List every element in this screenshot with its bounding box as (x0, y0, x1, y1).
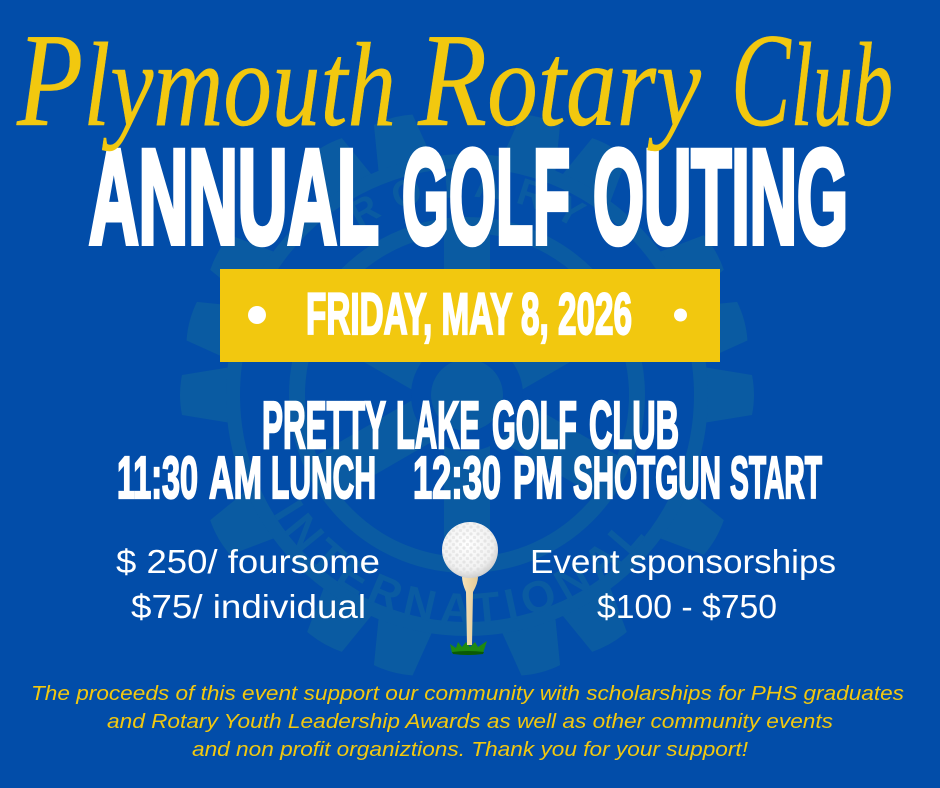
date banner (220, 269, 720, 362)
footer note (31, 683, 904, 761)
title: Plymouth Rotary Club (16, 6, 893, 154)
title: Plymouth Rotary Club: Club (731, 6, 893, 154)
date banner: FRIDAY, MAY 8, 2026 (306, 282, 632, 347)
heading: Annual Golf Outing: ANNUAL (89, 123, 379, 272)
footer note: and non profit organiztions. Thank you for your support! (192, 739, 748, 761)
pricing: $ 250/ foursome (116, 543, 380, 580)
title: Plymouth Rotary Club: Plymouth (16, 6, 396, 154)
venue name: GOLF (492, 389, 577, 463)
sponsorships: $100 - $750 (597, 588, 777, 625)
venue name: PRETTY (262, 389, 386, 463)
text: START (730, 444, 822, 511)
pricing: $75/ individual (131, 588, 366, 625)
schedule: LUNCH (271, 444, 376, 511)
venue name: LAKE (396, 389, 480, 463)
pricing (116, 543, 380, 625)
venue name (262, 389, 679, 463)
watermark: rotary gear: ROTARY (353, 172, 586, 225)
heading: Annual Golf Outing: GOLF (402, 123, 570, 272)
schedule: 11:30 (117, 444, 198, 511)
title: Plymouth Rotary Club: Rotary (417, 6, 702, 154)
sponsorships: Event sponsorships (530, 543, 836, 580)
schedule: SHOTGUN (573, 444, 721, 511)
schedule (117, 444, 822, 511)
schedule: 12:30 (413, 444, 501, 511)
footer note: The proceeds of this event support our community with scholarships for PHS graduates (31, 683, 904, 705)
text: CLUB (589, 389, 679, 463)
icon: golf ball on tee (442, 522, 498, 655)
sponsorships (530, 543, 836, 625)
schedule: AM (209, 444, 262, 511)
schedule: PM (513, 444, 563, 511)
watermark: rotary gear: INTERNATIONAL (274, 500, 644, 622)
watermark: rotary gear (180, 114, 781, 676)
footer note: and Rotary Youth Leadership Awards as well as other community events (107, 711, 833, 733)
